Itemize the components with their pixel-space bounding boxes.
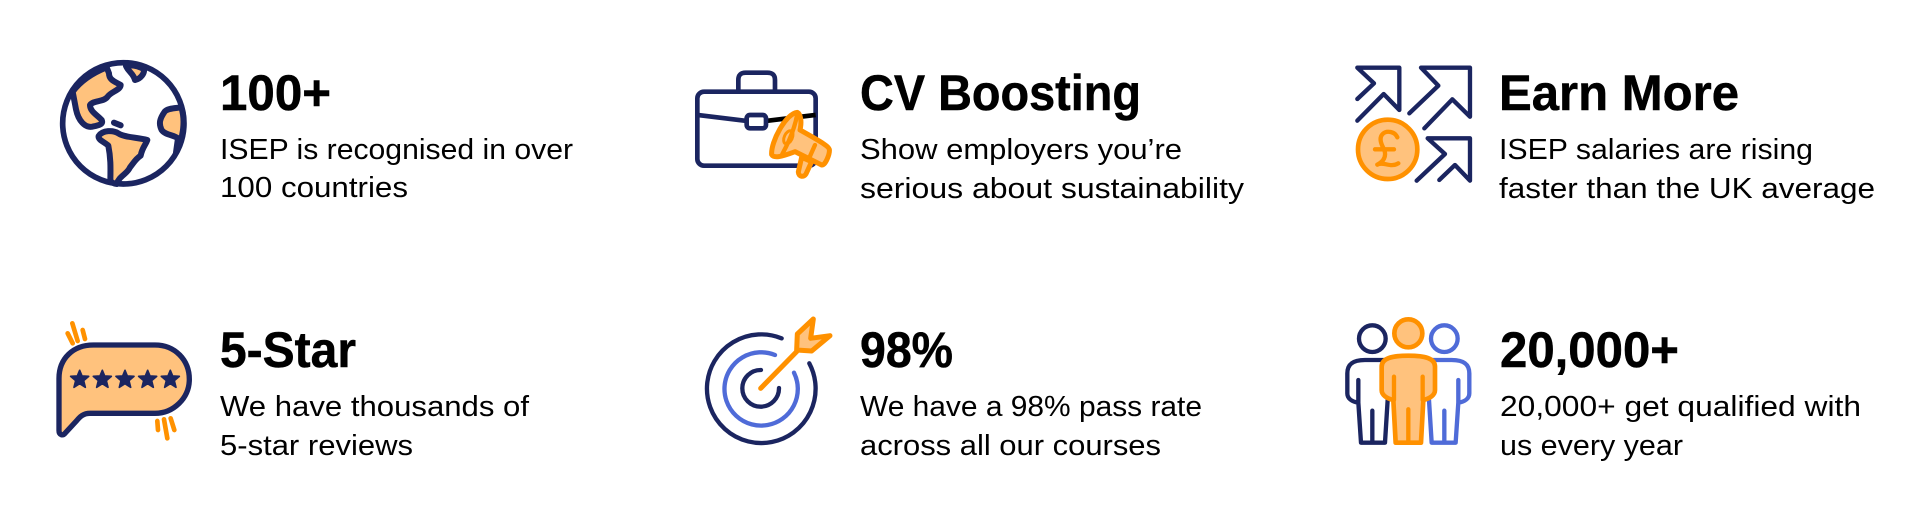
text: show employers you're serious bbox=[860, 134, 1245, 205]
text: thousands of reviews: 5-star reviews bbox=[220, 430, 413, 462]
text: thousands of reviews bbox=[220, 391, 530, 462]
icon: speech bubble with stars bbox=[59, 323, 189, 438]
panel: CV Boosting bbox=[697, 65, 1245, 205]
icon: three people bbox=[1347, 319, 1469, 443]
icon: globe bbox=[63, 63, 184, 184]
heading: CV Boosting: CV Boosting bbox=[860, 65, 1141, 121]
text: show employers you're serious: Show employers you’re bbox=[860, 134, 1182, 166]
panel: 5-Star bbox=[59, 322, 530, 462]
icon: target with dart bbox=[707, 319, 830, 443]
text: pass rate: across all our courses bbox=[860, 430, 1161, 462]
text: salaries rising faster: faster than the UK average bbox=[1499, 173, 1875, 205]
text: salaries rising faster bbox=[1499, 134, 1875, 205]
panel: Earn More bbox=[1357, 65, 1875, 205]
icon: rising arrows with pound coin bbox=[1357, 68, 1470, 181]
panel: 20,000+ bbox=[1347, 319, 1861, 462]
text: pass rate: We have a 98% pass rate bbox=[860, 391, 1202, 423]
heading: 98%: 98% bbox=[860, 322, 953, 378]
panel: 98% bbox=[707, 319, 1202, 462]
icon: briefcase with megaphone bbox=[697, 73, 829, 176]
text: qualified every year bbox=[1500, 391, 1861, 462]
text: qualified every year: 20,000+ get qualified with bbox=[1500, 391, 1861, 423]
text: show employers you're serious: serious about sustainability bbox=[860, 173, 1245, 205]
text: recognised in over 100 countries: ISEP is recognised in over bbox=[220, 134, 573, 166]
text: recognised in over 100 countries: 100 countries bbox=[220, 172, 408, 204]
text: qualified every year: us every year bbox=[1500, 430, 1683, 462]
heading: 100+: 100+ bbox=[220, 65, 331, 121]
text: recognised in over 100 countries bbox=[220, 134, 573, 204]
heading: Earn More: Earn More bbox=[1499, 65, 1739, 121]
panel: 100+ countries bbox=[63, 63, 573, 204]
text: pass rate bbox=[860, 391, 1202, 462]
heading: 5-Star: 5-Star bbox=[220, 322, 356, 378]
text: salaries rising faster: ISEP salaries are rising bbox=[1499, 134, 1813, 166]
text: thousands of reviews: We have thousands of bbox=[220, 391, 530, 423]
heading: 20,000+: 20,000+ bbox=[1500, 322, 1679, 378]
